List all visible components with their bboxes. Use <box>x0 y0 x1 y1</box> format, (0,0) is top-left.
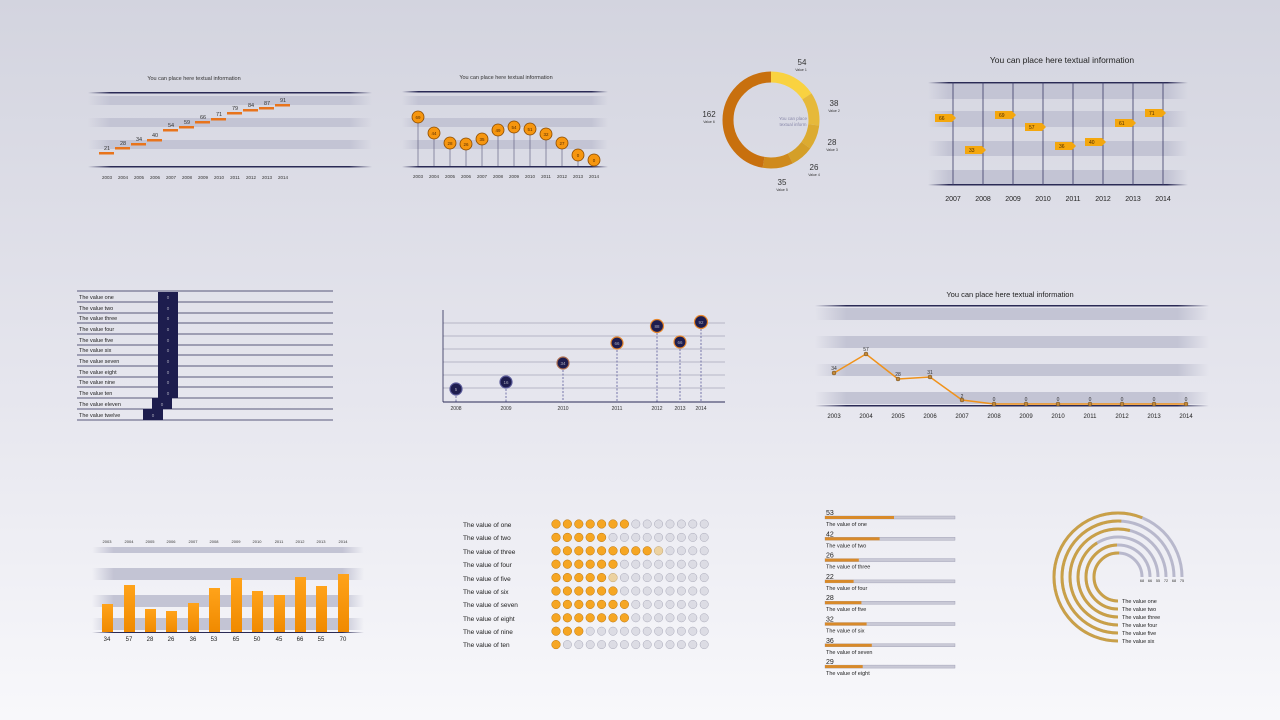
chart: lollipop circles 2003-2014: 2007 <box>477 174 488 179</box>
chart: step line 2003-2014: 66 <box>200 115 206 121</box>
chart: value list table: The value twelve <box>79 413 120 419</box>
chart: value list table: 0 <box>167 316 170 321</box>
chart: tag grid 2007-2014 <box>928 55 1188 203</box>
chart: bar chart 2003-2014: 55 <box>318 637 325 643</box>
chart: donut: Value 6 <box>703 120 715 124</box>
chart: lollipop circles 2003-2014: 35 <box>479 137 485 142</box>
chart: step line 2003-2014: 2007 <box>166 175 177 180</box>
chart: lollipop circles 2003-2014: 2009 <box>509 174 520 179</box>
chart: value list table: The value one <box>79 295 114 301</box>
chart: progress bars: 26 <box>826 553 834 560</box>
chart: tag grid 2007-2014: 2010 <box>1035 196 1051 203</box>
chart: progress bars: 36 <box>826 638 834 645</box>
chart: concentric arcs: The value four <box>1122 623 1157 629</box>
chart: dark lollipop 2008-2014: 66 <box>677 340 683 345</box>
chart: tag grid 2007-2014: 2014 <box>1155 196 1171 203</box>
chart: value list table: 0 <box>167 359 170 364</box>
chart: step line 2003-2014: 84 <box>248 103 254 109</box>
chart: step line 2003-2014: 2003 <box>102 175 113 180</box>
chart: lollipop circles 2003-2014: 0 <box>577 153 580 158</box>
chart: lollipop circles 2003-2014: 2003 <box>413 174 424 179</box>
chart title: You can place here textual information <box>147 76 241 82</box>
chart: value list table: 0 <box>167 348 170 353</box>
chart: donut: textual inform <box>779 122 807 127</box>
chart: tag grid 2007-2014: 2009 <box>1005 196 1021 203</box>
chart: tag grid 2007-2014: 2007 <box>945 196 961 203</box>
chart: lollipop circles 2003-2014: 2012 <box>557 174 568 179</box>
chart: step line 2003-2014: 2006 <box>150 175 161 180</box>
chart: line chart 2003-2014 <box>815 290 1209 420</box>
chart: lollipop circles 2003-2014: 2004 <box>429 174 440 179</box>
chart: donut: 26 <box>810 163 819 172</box>
chart: donut: Value 2 <box>828 109 840 113</box>
chart: tag grid 2007-2014: 2013 <box>1125 196 1141 203</box>
chart: bar chart 2003-2014: 2013 <box>317 539 326 544</box>
chart: step line 2003-2014: 2005 <box>134 175 145 180</box>
chart: dark lollipop 2008-2014: 2014 <box>695 406 707 412</box>
chart: dark lollipop 2008-2014: 5 <box>455 387 458 392</box>
chart: dark lollipop 2008-2014: 2010 <box>557 406 569 412</box>
chart: bar chart 2003-2014: 2006 <box>167 539 176 544</box>
chart: donut: 162 <box>702 110 716 119</box>
chart: dark lollipop 2008-2014: 2012 <box>651 406 663 412</box>
chart: donut: 28 <box>828 138 837 147</box>
chart: bar chart 2003-2014: 2007 <box>189 539 198 544</box>
chart: lollipop circles 2003-2014: 2008 <box>493 174 504 179</box>
chart: bar chart 2003-2014: 2014 <box>339 539 348 544</box>
chart: concentric arcs: 55 <box>1156 579 1160 583</box>
chart: value list table: 0 <box>167 306 170 311</box>
chart: line chart 2003-2014: 2011 <box>1084 414 1097 420</box>
chart: bar chart 2003-2014: 2005 <box>146 539 155 544</box>
chart: line chart 2003-2014: 0 <box>1057 397 1060 403</box>
chart: bar chart 2003-2014: 2009 <box>232 539 241 544</box>
chart: value list table <box>77 291 333 420</box>
chart: line chart 2003-2014: 2005 <box>891 414 905 420</box>
chart: value list table: 0 <box>167 380 170 385</box>
chart: step line 2003-2014: 2008 <box>182 175 193 180</box>
chart: concentric arcs: The value five <box>1122 631 1156 637</box>
chart: value list table: The value four <box>79 327 114 333</box>
chart: step line 2003-2014: 40 <box>152 133 158 139</box>
chart: value list table: The value seven <box>79 359 119 365</box>
chart: step line 2003-2014: 21 <box>104 146 110 152</box>
chart: bar chart 2003-2014 <box>92 539 364 643</box>
chart: bar chart 2003-2014: 2011 <box>275 539 284 544</box>
chart: donut: Value 4 <box>808 173 820 177</box>
chart: bar chart 2003-2014: 36 <box>190 637 197 643</box>
chart: dark lollipop 2008-2014: 2013 <box>674 406 686 412</box>
chart: donut: 38 <box>830 99 839 108</box>
chart: step line 2003-2014: 2013 <box>262 175 273 180</box>
chart: step line 2003-2014: 54 <box>168 123 174 129</box>
chart: dot matrix: The value of six <box>463 589 509 596</box>
chart: line chart 2003-2014: 2008 <box>987 414 1001 420</box>
chart: value list table: 0 <box>167 338 170 343</box>
chart: bar chart 2003-2014: 2003 <box>103 539 112 544</box>
chart: dot matrix: The value of seven <box>463 602 518 609</box>
chart: bar chart 2003-2014: 50 <box>254 637 261 643</box>
chart: progress bars: 29 <box>826 659 834 666</box>
chart: progress bars: The value of three <box>826 565 870 571</box>
chart: dot matrix: The value of five <box>463 576 511 583</box>
chart: lollipop circles 2003-2014: 69 <box>415 115 421 120</box>
chart: line chart 2003-2014: 0 <box>1153 397 1156 403</box>
chart: bar chart 2003-2014: 66 <box>297 637 304 643</box>
chart: line chart 2003-2014: 0 <box>1025 397 1028 403</box>
chart: lollipop circles 2003-2014 <box>402 75 608 179</box>
chart: step line 2003-2014: 34 <box>136 137 142 143</box>
chart: bar chart 2003-2014: 34 <box>104 637 111 643</box>
chart: donut <box>702 58 840 192</box>
chart: value list table: 0 <box>161 402 164 407</box>
chart: value list table: 0 <box>167 370 170 375</box>
chart title: You can place here textual information <box>946 290 1074 299</box>
chart: lollipop circles 2003-2014: 2005 <box>445 174 456 179</box>
chart: step line 2003-2014: 91 <box>280 98 286 104</box>
chart: progress bars: The value of five <box>826 607 866 613</box>
chart: progress bars: 42 <box>826 531 834 538</box>
chart: progress bars: The value of seven <box>826 650 872 656</box>
chart: bar chart 2003-2014: 28 <box>147 637 154 643</box>
chart: dark lollipop 2008-2014: 92 <box>698 320 704 325</box>
chart: donut: Value 3 <box>826 148 838 152</box>
chart: progress bars <box>825 510 955 677</box>
chart: dark lollipop 2008-2014: 34 <box>560 361 566 366</box>
chart: dot matrix: The value of four <box>463 562 513 569</box>
chart: step line 2003-2014: 79 <box>232 106 238 112</box>
chart: dot matrix <box>463 520 708 649</box>
chart: bar chart 2003-2014: 2008 <box>210 539 219 544</box>
chart: bar chart 2003-2014: 45 <box>276 637 283 643</box>
chart: value list table: The value eleven <box>79 402 121 408</box>
chart: donut: 35 <box>778 178 787 187</box>
chart: value list table: 0 <box>167 327 170 332</box>
chart: value list table: The value eight <box>79 370 117 376</box>
chart: step line 2003-2014: 28 <box>120 141 126 147</box>
chart: bar chart 2003-2014: 26 <box>168 637 175 643</box>
chart: lollipop circles 2003-2014: 26 <box>463 142 469 147</box>
chart: dot matrix: The value of nine <box>463 629 513 636</box>
chart: dark lollipop 2008-2014: 2009 <box>500 406 512 412</box>
chart: step line 2003-2014 <box>88 76 372 180</box>
chart: dark lollipop 2008-2014: 2008 <box>450 406 462 412</box>
chart: tag grid 2007-2014: 69 <box>999 113 1005 119</box>
chart: line chart 2003-2014: 28 <box>895 372 901 378</box>
chart: lollipop circles 2003-2014: 51 <box>527 127 533 132</box>
chart: step line 2003-2014: 59 <box>184 120 190 126</box>
chart: bar chart 2003-2014: 2004 <box>125 539 134 544</box>
chart: tag grid 2007-2014: 2012 <box>1095 196 1111 203</box>
chart: value list table: The value six <box>79 348 112 354</box>
chart: bar chart 2003-2014: 65 <box>233 637 240 643</box>
chart: concentric arcs <box>1054 513 1184 645</box>
chart: tag grid 2007-2014: 33 <box>969 148 975 154</box>
chart: lollipop circles 2003-2014: 2011 <box>541 174 551 179</box>
chart: line chart 2003-2014: 2012 <box>1115 414 1129 420</box>
chart: donut: 54 <box>798 58 807 67</box>
chart: tag grid 2007-2014: 61 <box>1119 121 1125 127</box>
chart: progress bars: 28 <box>826 595 834 602</box>
chart: line chart 2003-2014: 2006 <box>923 414 937 420</box>
chart: dot matrix: The value of eight <box>463 616 515 623</box>
chart: line chart 2003-2014: 2010 <box>1051 414 1065 420</box>
chart: step line 2003-2014: 2011 <box>230 175 240 180</box>
chart: tag grid 2007-2014: 2011 <box>1065 196 1081 203</box>
chart: progress bars: The value of six <box>826 628 865 634</box>
chart: lollipop circles 2003-2014: 44 <box>431 131 437 136</box>
chart: concentric arcs: 66 <box>1148 579 1152 583</box>
chart: step line 2003-2014: 87 <box>264 101 270 107</box>
chart: lollipop circles 2003-2014: 2013 <box>573 174 584 179</box>
chart: line chart 2003-2014: 2 <box>961 394 964 400</box>
chart title: You can place here textual information <box>459 75 553 81</box>
chart: progress bars: 22 <box>826 574 834 581</box>
chart: line chart 2003-2014: 0 <box>1089 397 1092 403</box>
chart: dark lollipop 2008-2014: 88 <box>654 324 660 329</box>
chart: tag grid 2007-2014: 36 <box>1059 144 1065 150</box>
chart: lollipop circles 2003-2014: 0 <box>593 158 596 163</box>
chart: dot matrix: The value of ten <box>463 642 510 649</box>
chart: concentric arcs: 72 <box>1164 579 1168 583</box>
chart: value list table: The value ten <box>79 391 112 397</box>
chart: bar chart 2003-2014: 2012 <box>296 539 305 544</box>
chart: tag grid 2007-2014: 71 <box>1149 111 1155 117</box>
chart: bar chart 2003-2014: 70 <box>340 637 347 643</box>
chart: line chart 2003-2014: 2007 <box>955 414 969 420</box>
chart: dark lollipop 2008-2014 <box>443 310 725 412</box>
chart: step line 2003-2014: 2012 <box>246 175 257 180</box>
chart: dark lollipop 2008-2014: 16 <box>503 380 509 385</box>
chart: lollipop circles 2003-2014: 2006 <box>461 174 472 179</box>
chart: concentric arcs: 68 <box>1172 579 1176 583</box>
chart: value list table: 0 <box>167 295 170 300</box>
chart: progress bars: 53 <box>826 510 834 517</box>
chart: line chart 2003-2014: 0 <box>993 397 996 403</box>
chart: bar chart 2003-2014: 57 <box>126 637 133 643</box>
chart: dark lollipop 2008-2014: 66 <box>614 341 620 346</box>
chart: bar chart 2003-2014: 53 <box>211 637 218 643</box>
chart: value list table: The value nine <box>79 380 115 386</box>
chart: line chart 2003-2014: 0 <box>1121 397 1124 403</box>
chart: value list table: 0 <box>167 391 170 396</box>
chart: step line 2003-2014: 2010 <box>214 175 225 180</box>
chart: lollipop circles 2003-2014: 28 <box>447 141 453 146</box>
chart: concentric arcs: 75 <box>1180 579 1184 583</box>
chart: tag grid 2007-2014: 57 <box>1029 125 1035 131</box>
chart: step line 2003-2014: 2004 <box>118 175 129 180</box>
chart: progress bars: 32 <box>826 616 834 624</box>
chart: concentric arcs: The value six <box>1122 639 1155 645</box>
chart: value list table: The value two <box>79 306 113 312</box>
chart: donut: Value 5 <box>776 188 788 192</box>
chart: lollipop circles 2003-2014: 2014 <box>589 174 600 179</box>
chart: tag grid 2007-2014: 66 <box>939 116 945 122</box>
chart: value list table: The value three <box>79 316 117 322</box>
chart: line chart 2003-2014: 2014 <box>1179 414 1193 420</box>
chart: lollipop circles 2003-2014: 2010 <box>525 174 536 179</box>
chart: concentric arcs: The value two <box>1122 607 1156 613</box>
chart: donut: You can place <box>779 116 808 121</box>
chart: dot matrix: The value of one <box>463 522 512 529</box>
chart: step line 2003-2014: 71 <box>216 112 222 118</box>
chart title: You can place here textual information <box>990 55 1134 65</box>
chart: line chart 2003-2014: 34 <box>831 366 837 372</box>
chart: dot matrix: The value of two <box>463 535 511 542</box>
chart: line chart 2003-2014: 2003 <box>827 414 841 420</box>
chart: lollipop circles 2003-2014: 49 <box>495 128 501 133</box>
chart: line chart 2003-2014: 31 <box>927 370 933 376</box>
chart: value list table: 0 <box>152 413 155 418</box>
chart: tag grid 2007-2014: 40 <box>1089 140 1095 146</box>
chart: line chart 2003-2014: 57 <box>863 347 869 353</box>
chart: line chart 2003-2014: 2013 <box>1147 414 1161 420</box>
chart: line chart 2003-2014: 2004 <box>859 414 873 420</box>
chart: line chart 2003-2014: 0 <box>1185 397 1188 403</box>
chart: dot matrix: The value of three <box>463 549 516 556</box>
chart: tag grid 2007-2014: 2008 <box>975 196 991 203</box>
chart: bar chart 2003-2014: 2010 <box>253 539 262 544</box>
chart: line chart 2003-2014: 2009 <box>1019 414 1033 420</box>
chart: progress bars: The value of four <box>826 586 867 592</box>
chart: lollipop circles 2003-2014: 27 <box>559 141 565 146</box>
chart: progress bars: The value of one <box>826 522 867 528</box>
chart: concentric arcs: The value one <box>1122 599 1157 605</box>
chart: donut: Value 1 <box>795 68 807 72</box>
chart: step line 2003-2014: 2009 <box>198 175 209 180</box>
chart: lollipop circles 2003-2014: 54 <box>511 125 517 130</box>
chart: progress bars: The value of eight <box>826 671 870 677</box>
chart: dark lollipop 2008-2014: 2011 <box>612 406 623 412</box>
chart: step line 2003-2014: 2014 <box>278 175 289 180</box>
chart: concentric arcs: The value three <box>1122 615 1160 621</box>
chart: lollipop circles 2003-2014: 32 <box>543 132 549 137</box>
chart: progress bars: The value of two <box>826 543 866 549</box>
chart: concentric arcs: 68 <box>1140 579 1144 583</box>
chart: value list table: The value five <box>79 338 113 344</box>
